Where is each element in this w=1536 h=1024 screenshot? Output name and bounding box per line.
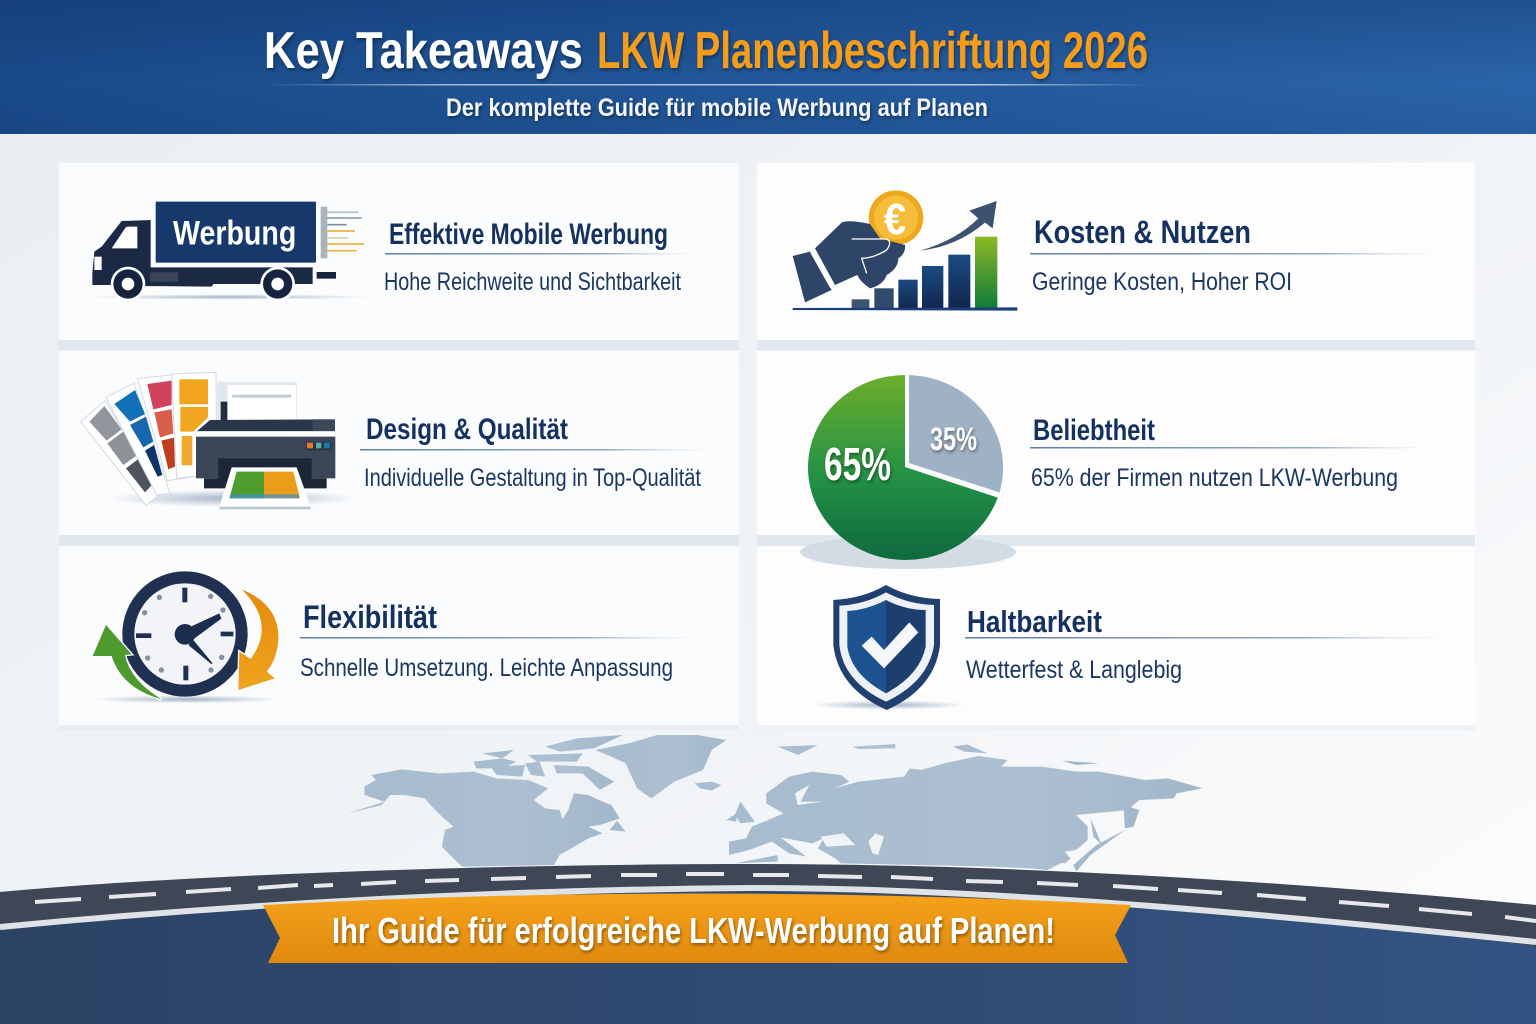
heading: Kosten & Nutzen	[1034, 214, 1251, 250]
pie chart: 65% / 35%	[800, 360, 1020, 569]
subtitle: Der komplette Guide für mobile Werbung auf Planen	[446, 94, 988, 122]
panel: haltbarkeit	[757, 546, 1475, 730]
banner text: Ihr Guide für erfolgreiche LKW-Werbung auf Planen!	[332, 910, 1055, 951]
description: Wetterfest & Langlebig	[966, 656, 1182, 684]
panel: beliebtheit	[757, 351, 1475, 546]
heading: Haltbarkeit	[967, 604, 1102, 639]
truck lettering: Werbung	[173, 214, 296, 252]
road	[0, 864, 1536, 946]
icon: clock with arrows	[92, 571, 282, 703]
heading: Design & Qualität	[366, 413, 568, 446]
description: 65% der Firmen nutzen LKW-Werbung	[1031, 464, 1398, 492]
title: Key Takeaways	[264, 22, 583, 80]
panel: design und qualitaet	[59, 351, 739, 546]
description: Hohe Reichweite und Sichtbarkeit	[384, 268, 681, 296]
description: Schnelle Umsetzung. Leichte Anpassung	[300, 654, 673, 682]
pie label 35: 35%	[930, 421, 977, 457]
banner	[263, 894, 1131, 963]
heading: Effektive Mobile Werbung	[389, 218, 668, 251]
description: Geringe Kosten, Hoher ROI	[1032, 268, 1292, 296]
title: LKW Planenbeschriftung 2026	[597, 22, 1148, 80]
title	[264, 22, 1148, 80]
header band	[0, 0, 1536, 134]
icon: truck	[87, 202, 373, 301]
icon: hand with coin and growth chart: €	[884, 196, 906, 244]
pie label 65: 65%	[824, 438, 891, 490]
icon: colour swatches and printer	[81, 372, 358, 509]
description: Individuelle Gestaltung in Top-Qualität	[364, 464, 701, 492]
icon: hand with coin and growth chart	[793, 190, 1017, 311]
world map	[347, 735, 1202, 872]
lower dark ground	[0, 888, 1536, 1024]
panel: flexibilitaet	[59, 546, 739, 730]
heading: Beliebtheit	[1033, 414, 1155, 447]
heading: Flexibilität	[303, 599, 437, 635]
panel: kosten und nutzen	[757, 163, 1475, 350]
icon: shield with check	[810, 585, 967, 710]
panel: effektive mobile werbung	[59, 163, 739, 350]
